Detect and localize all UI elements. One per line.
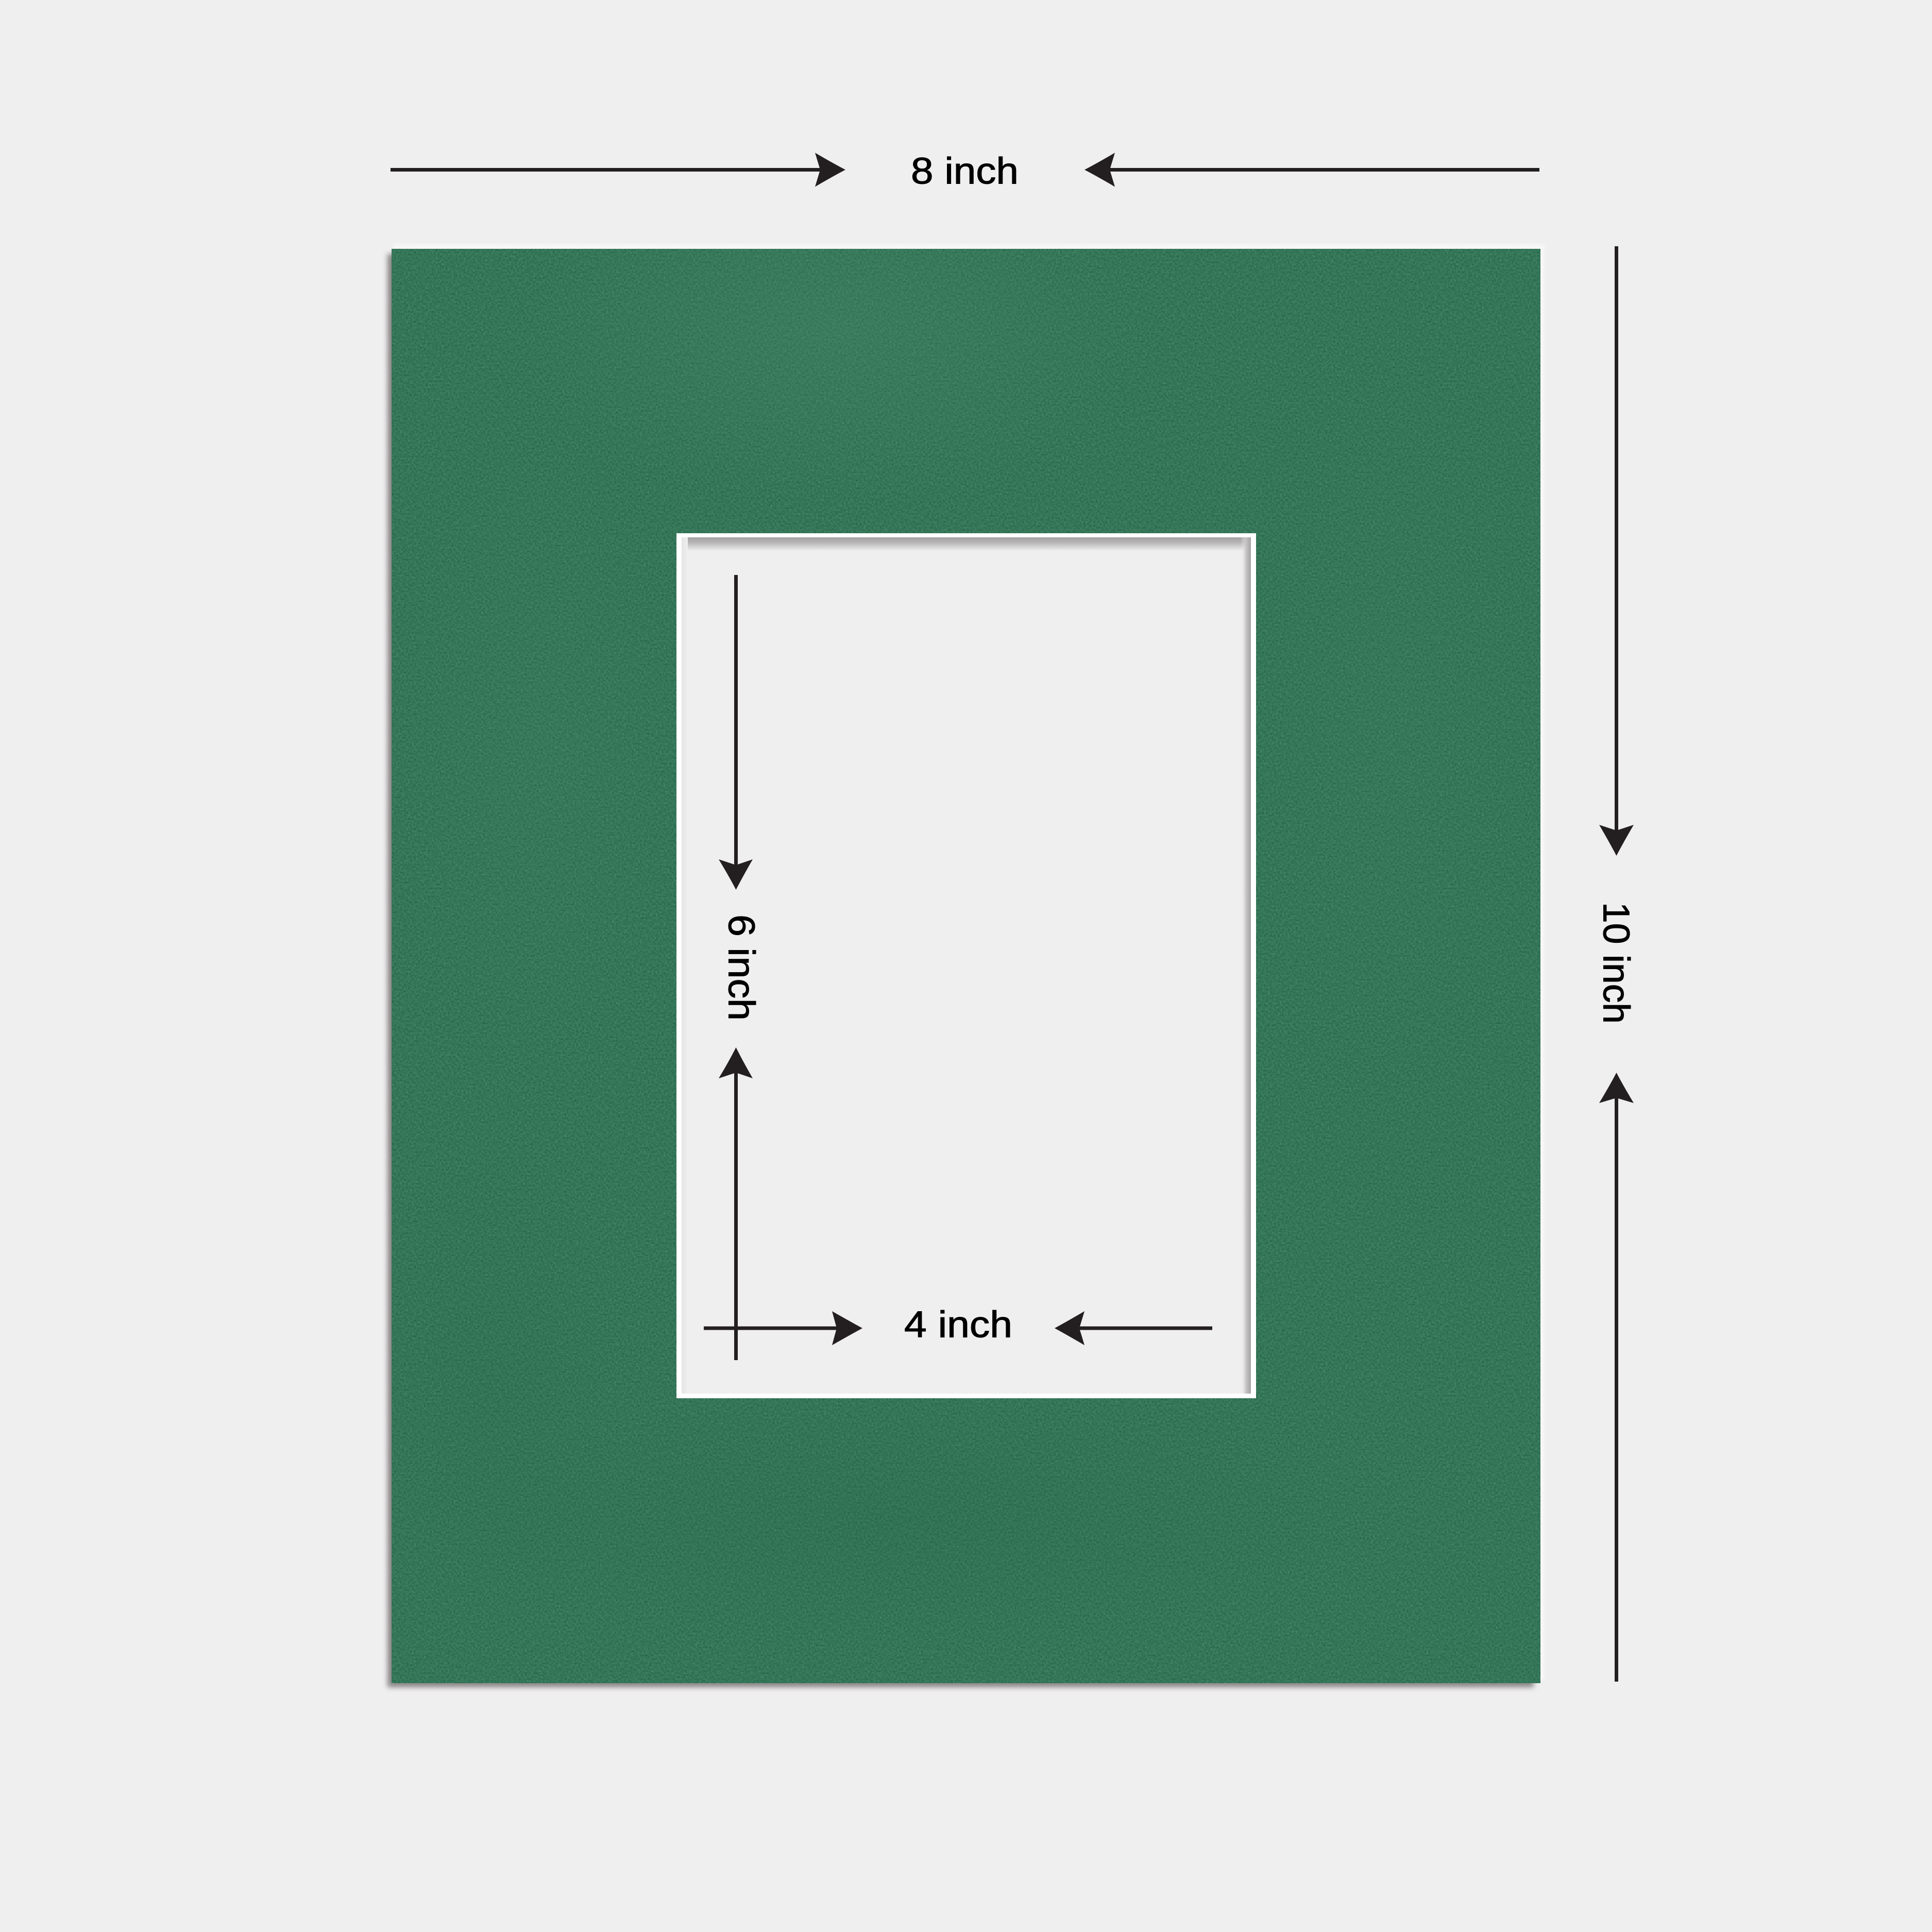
arrow: window pointing up [719, 1047, 753, 1360]
dimension: 8 inch width [391, 150, 1539, 192]
arrow: right side pointing down [1599, 246, 1634, 856]
label: 6 inch: 6 inch [720, 914, 762, 1021]
label: 8 inch: 8 inch [911, 150, 1019, 192]
arrow: top left pointing right [391, 152, 845, 187]
mat drop shadow [387, 244, 1545, 1687]
label: 4 inch: 4 inch [904, 1303, 1012, 1346]
arrow: right side pointing up [1599, 1073, 1634, 1682]
window opening [676, 533, 1256, 1398]
panel: green mat board [355, 155, 1545, 1687]
arrow: window pointing right [704, 1311, 862, 1345]
dimension: 6 inch window height [719, 575, 762, 1360]
mat surface [355, 155, 1540, 1683]
arrow: window pointing down [719, 575, 753, 890]
arrow: window pointing left [1055, 1311, 1212, 1345]
dimension: 10 inch height [1595, 246, 1637, 1682]
label: 10 inch: 10 inch [1595, 902, 1637, 1024]
arrow: top right pointing left [1084, 152, 1539, 187]
dimension: 4 inch window width [704, 1303, 1212, 1346]
